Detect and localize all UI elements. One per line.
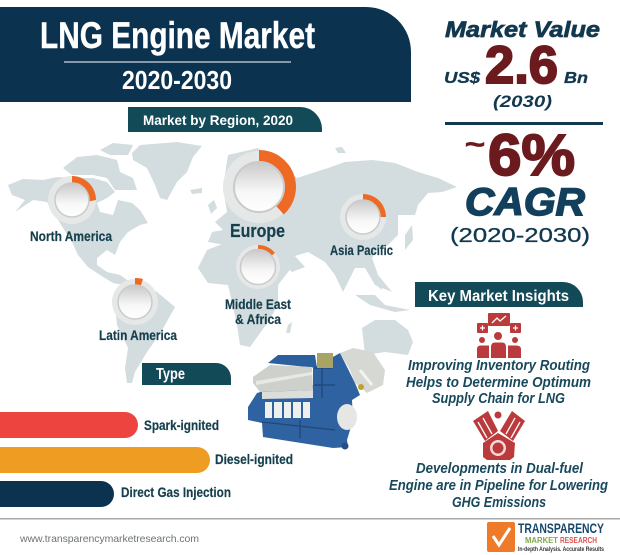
label: middle east and africa: & Africa (235, 312, 281, 327)
icon: engine (473, 411, 525, 460)
insight text: dual-fuel engine: Developments in Dual-fuel (416, 461, 584, 477)
market value figure: Bn (564, 70, 588, 87)
logo: RESEARCH (560, 536, 597, 545)
label: middle east and africa (225, 297, 291, 327)
insight text: dual-fuel engine (389, 461, 608, 511)
heading: type (142, 363, 231, 385)
label: latin america: Latin America (99, 328, 177, 343)
cagr figure: ~ (465, 129, 485, 159)
label: diesel-ignited: Diesel-ignited (215, 452, 293, 467)
logo: MARKET (525, 536, 558, 545)
market value figure (444, 36, 588, 95)
cagr label: CAGR (465, 181, 585, 224)
heading: market by region (128, 107, 322, 132)
heading: type: Type (156, 366, 185, 383)
donut: north america (48, 176, 96, 224)
label: europe: Europe (230, 220, 285, 241)
logo (487, 520, 605, 553)
donut: europe (223, 150, 296, 223)
label: middle east and africa: Middle East (225, 297, 291, 312)
label: direct gas injection: Direct Gas Injection (121, 485, 231, 500)
bar: spark-ignited (0, 412, 138, 438)
market value figure: US$ (444, 70, 481, 87)
website url: www.transparencymarketresearch.com (19, 533, 199, 545)
market value figure: 2.6 (485, 36, 558, 95)
label: spark-ignited: Spark-ignited (144, 418, 219, 433)
insight text: inventory routing (406, 358, 591, 407)
market value heading: Market Value (445, 17, 600, 42)
donut: asia pacific (340, 194, 386, 240)
heading: key market insights: Key Market Insights (428, 288, 569, 305)
cagr period: (2020-2030) (450, 225, 590, 247)
insight text: inventory routing: Supply Chain for LNG (432, 391, 565, 407)
insight text: inventory routing: Improving Inventory Routing (408, 358, 590, 374)
insight text: dual-fuel engine: GHG Emissions (452, 495, 546, 511)
donut: middle east and africa (236, 245, 280, 289)
logo: In-depth Analysis. Accurate Results (518, 547, 605, 553)
cagr figure: 6% (488, 123, 575, 188)
subtitle years: 2020-2030 (122, 65, 232, 95)
icon: team with chart (477, 313, 521, 358)
insight text: inventory routing: Helps to Determine Optimum (406, 375, 591, 391)
label: asia pacific: Asia Pacific (330, 243, 393, 258)
heading: market by region: Market by Region, 2020 (143, 112, 293, 128)
donut: latin america (112, 278, 158, 325)
bar: direct gas injection (0, 481, 114, 507)
world map (8, 142, 457, 383)
heading: key market insights (415, 282, 583, 307)
label: north america: North America (30, 229, 112, 244)
engine illustration (248, 348, 385, 450)
bar: diesel-ignited (0, 447, 210, 473)
market value year: (2030) (493, 93, 553, 111)
header banner (0, 7, 411, 102)
title: LNG Engine Market (40, 15, 315, 56)
